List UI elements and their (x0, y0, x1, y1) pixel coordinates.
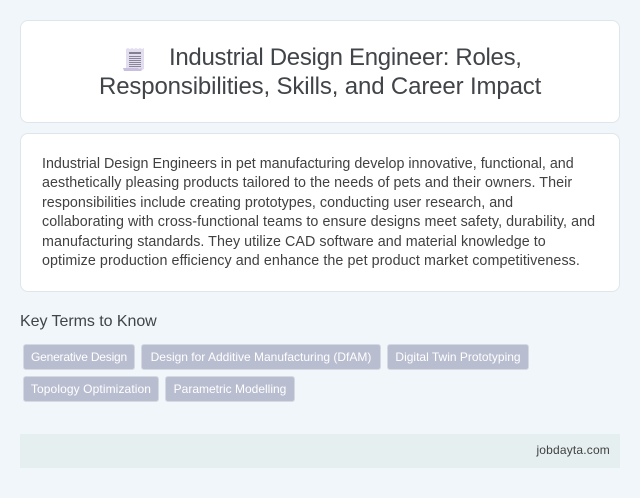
panel: title card (20, 20, 620, 123)
heading: key terms: Key Terms to Know (20, 313, 157, 330)
text block: description: responsibilities include creating prototypes, conducting user research, and (42, 195, 513, 211)
tag (387, 344, 529, 370)
title: Responsibilities, Skills, and Career Impact (99, 73, 541, 100)
text block: description: optimize production efficiency and enhance the pet product market competitiveness. (42, 253, 580, 269)
text block: description (42, 156, 595, 269)
tag: Parametric Modelling (174, 382, 286, 396)
footer bar (20, 434, 620, 468)
tag: Generative Design (31, 350, 127, 364)
tag (23, 376, 159, 402)
title: Industrial Design Engineer: Roles, (169, 44, 522, 71)
tag (165, 376, 295, 402)
icon: document scroll (123, 48, 144, 71)
title (99, 44, 542, 100)
text block: description: manufacturing standards. They utilize CAD software and material knowledge to (42, 234, 546, 250)
panel: description (20, 133, 620, 292)
tag: Topology Optimization (31, 382, 151, 396)
tag (141, 344, 381, 370)
text block: description: aesthetically pleasing products tailored to the needs of pets and their owners. Their (42, 175, 572, 191)
text block: description: collaborating with cross-functional teams to ensure designs meet safety, durability, and (42, 214, 595, 230)
footer text: jobdayta.com (536, 443, 610, 457)
tag: Digital Twin Prototyping (395, 350, 521, 364)
tags: key terms (23, 344, 529, 402)
text block: description: Industrial Design Engineers in pet manufacturing develop innovative, functional, and (42, 156, 574, 172)
tag: Design for Additive Manufacturing (DfAM) (151, 350, 371, 364)
tag (23, 344, 135, 370)
